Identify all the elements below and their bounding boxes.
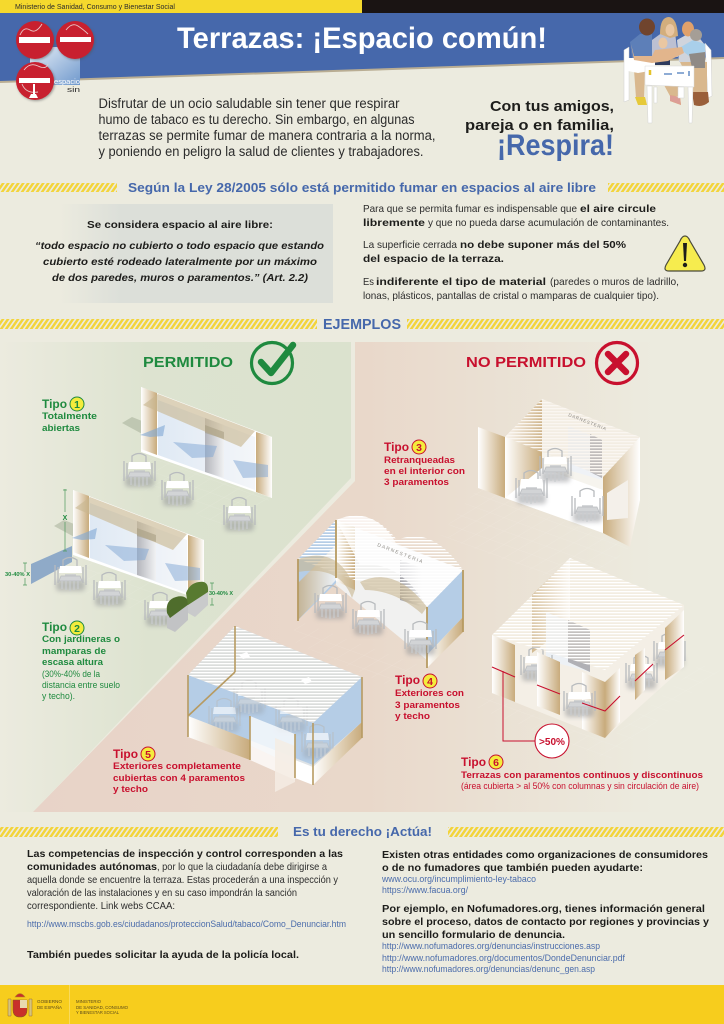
label: tipo 3: 3 [416,442,422,454]
label: tipo 1: Totalmente [42,411,97,422]
label: tipo 4: 3 paramentos [395,700,460,711]
panel: definition [35,204,333,303]
icon: cross [596,342,638,384]
label: tipo 1 [42,397,97,434]
label: tipo 4 [395,674,464,722]
illustration: tipo 3: DARNESTERIA [568,412,607,431]
text: conditions: no debe suponer más del 50% [460,239,627,251]
label: tipo 5: 5 [145,749,151,761]
label: tipo 6: Terrazas con paramentos continuos y discontinuos [461,770,703,781]
title: Terrazas: ¡Espacio común! [177,22,547,55]
icon: family at table [624,17,712,123]
text: otras entidades: un sencillo formulario de denuncia. [382,929,565,941]
label: tipo 6: 6 [493,757,499,769]
text: otras entidades: sobre el proceso, datos de contacto por regiones y provincias y [382,916,709,928]
slogan: Respira: Con tus amigos, [490,98,614,115]
label: tipo 3 [384,440,465,488]
section heading: ejemplos [0,317,724,333]
panel: no permitido background [33,342,724,812]
footer: GOBIERNO [37,999,62,1004]
text: otras entidades [381,849,709,974]
text: competencias [27,848,346,961]
logo: espacio sin humo [16,21,95,101]
slogan: Respira: pareja o en familia, [465,117,614,134]
panel: permitido background [0,342,351,812]
illustration: tipo 3 [440,399,640,590]
panel: definition: cubierto esté rodeado lateralmente por un máximo [43,256,318,268]
label: tipo 3: 3 paramentos [384,477,449,488]
text: competencias: correspondiente. Link webs CCAA: [27,900,175,912]
logo: espacio sin humo: espacio [54,79,80,86]
callout: >50% [535,724,569,758]
section heading: es tu derecho: Es tu derecho ¡Actúa! [293,824,432,839]
logo: espacio sin humo: sin [67,85,80,94]
label: tipo 5: cubiertas con 4 paramentos [113,773,245,784]
intro text: y poniendo en peligro la salud de clientes y trabajadores. [98,144,424,159]
label: tipo 1: abiertas [42,423,80,434]
text: conditions: y que no pueda darse acumulación de contaminantes. [428,217,669,229]
slogan: Respira [465,98,614,162]
heading: no permitido: NO PERMITIDO [466,355,586,371]
label: tipo 5: y techo [113,784,148,795]
footer: DE SANIDAD, CONSUMO [76,1005,129,1010]
footer: DE ESPAÑA [37,1004,63,1010]
label: tipo 2: escasa altura [42,657,104,668]
text: otras entidades: http://www.nofumadores.org/denuncias/instrucciones.asp [382,941,600,951]
text: otras entidades: Existen otras entidades como organizaciones de consumidores [382,849,708,861]
label: tipo 4: y techo [395,711,430,722]
label: tipo 6 [461,755,703,792]
label: tipo 1: Tipo [42,399,67,411]
label: tipo 3: Retranqueadas [384,455,455,466]
text: competencias: Las competencias de inspección y control corresponden a las [27,848,343,860]
label: tipo 2: y techo). [42,691,75,702]
icon: coat of arms [8,994,32,1017]
section heading: ley [0,180,724,195]
intro text [98,96,436,159]
label: tipo 5: Exteriores completamente [113,761,241,772]
text: conditions: (paredes o muros de ladrillo, [550,276,679,288]
panel: definition: “todo espacio no cubierto o todo espacio que estando [35,240,325,252]
label: tipo 6: Tipo [461,757,486,769]
section heading: ejemplos: EJEMPLOS [323,317,401,333]
slogan: Respira: ¡Respira! [497,129,614,162]
illustration: tipo 2 [5,489,234,632]
text: otras entidades: http://www.nofumadores.org/denuncias/denunc_gen.asp [382,964,595,974]
text: conditions [363,203,679,302]
callout: >50%: >50% [539,737,565,748]
label: tipo 4: 4 [427,676,433,688]
label: tipo 5 [113,747,245,795]
text: conditions: lonas, plásticos, pantallas de cristal o mamparas de cualquier tipo). [363,290,659,302]
label: tipo 2: distancia entre suelo [42,680,120,691]
footer [0,985,724,1024]
intro text: terrazas se permite fumar de manera contraria a la norma, [98,128,436,143]
text: competencias: http://www.mscbs.gob.es/ciudadanos/proteccionSalud/tabaco/Como_Denunciar.htm [27,919,346,929]
label: tipo 6: (área cubierta > al 50% con columnas y sin circulación de aire) [461,781,699,792]
illustration: tipo 4: DARNESTERIA [376,542,424,565]
text: conditions: La superficie cerrada [363,239,457,251]
label: tipo 2: Tipo [42,622,67,634]
label: tipo 2: (30%-40% de la [42,669,101,680]
dimension marks: 30-40% X [209,591,234,597]
label: tipo 3: en el interior con [384,466,465,477]
label: tipo 3: Tipo [384,442,409,454]
text: conditions: Es [363,276,374,288]
label: tipo 2: Con jardineras o [42,634,120,645]
top strip: Ministerio de Sanidad, Consumo y Bienestar Social [15,4,175,11]
heading: permitido: PERMITIDO [143,355,233,371]
text: conditions: el aire circule [580,203,656,215]
illustration: tipo 6 [470,558,720,760]
text: competencias: valoración de las instalaciones y en su caso impondrán la sanción [27,887,297,899]
dimension marks: X [63,515,68,522]
illustration: tipo 1 [120,387,272,531]
intro text: humo de tabaco es tu derecho. Sin embargo, en algunas [98,112,415,127]
label: tipo 1: 1 [74,399,80,411]
label: tipo 4: Exteriores con [395,688,464,699]
text: otras entidades: https://www.facua.org/ [382,885,468,895]
text: competencias: , por lo que la ciudadanía debe dirigirse a [157,861,327,873]
label: tipo 2: 2 [74,623,80,635]
text: conditions: indiferente el tipo de material [376,276,546,288]
illustration: tipo 5 [188,626,362,792]
label: tipo 5: Tipo [113,749,138,761]
illustration: tipo 4 [290,516,463,700]
dimension marks [5,489,234,605]
icon: warning [665,236,705,271]
text: conditions: del espacio de la terraza. [363,253,504,265]
panel: definition: de dos paredes, muros o paramentos.” (Art. 2.2) [52,272,309,284]
section heading: ley: Según la Ley 28/2005 sólo está permitido fumar en espacios al aire libre [128,180,596,195]
label: tipo 2 [42,621,120,702]
panel: definition: Se considera espacio al aire libre: [87,219,273,231]
top strip [0,0,724,13]
text: competencias: También puedes solicitar la ayuda de la policía local. [27,949,299,961]
text: conditions: libremente [363,217,425,229]
label: tipo 2: mamparas de [42,646,106,657]
dimension marks: 30-40% X [5,572,31,578]
text: otras entidades: http://www.nofumadores.org/documentos/DondeDenunciar.pdf [382,953,625,963]
header band [0,13,724,83]
text: otras entidades: o de no fumadores que también pueden ayudarte: [382,862,643,874]
text: competencias: comunidades autónomas [27,861,157,873]
icon: check [252,342,293,384]
footer: MINISTERIO [76,999,102,1004]
text: competencias: aquella donde se encuentre la terraza. Estas procederán a una inspección y [27,874,339,886]
label: tipo 4: Tipo [395,675,420,687]
intro text: Disfrutar de un ocio saludable sin tener que respirar [98,96,400,111]
text: otras entidades: Por ejemplo, en Nofumadores.org, tienes información general [382,903,705,915]
text: otras entidades: www.ocu.org/incumplimiento-ley-tabaco [381,874,536,884]
footer: Y BIENESTAR SOCIAL [76,1010,120,1015]
text: conditions: Para que se permita fumar es indispensable que [363,203,577,215]
section heading: es tu derecho [0,824,724,839]
